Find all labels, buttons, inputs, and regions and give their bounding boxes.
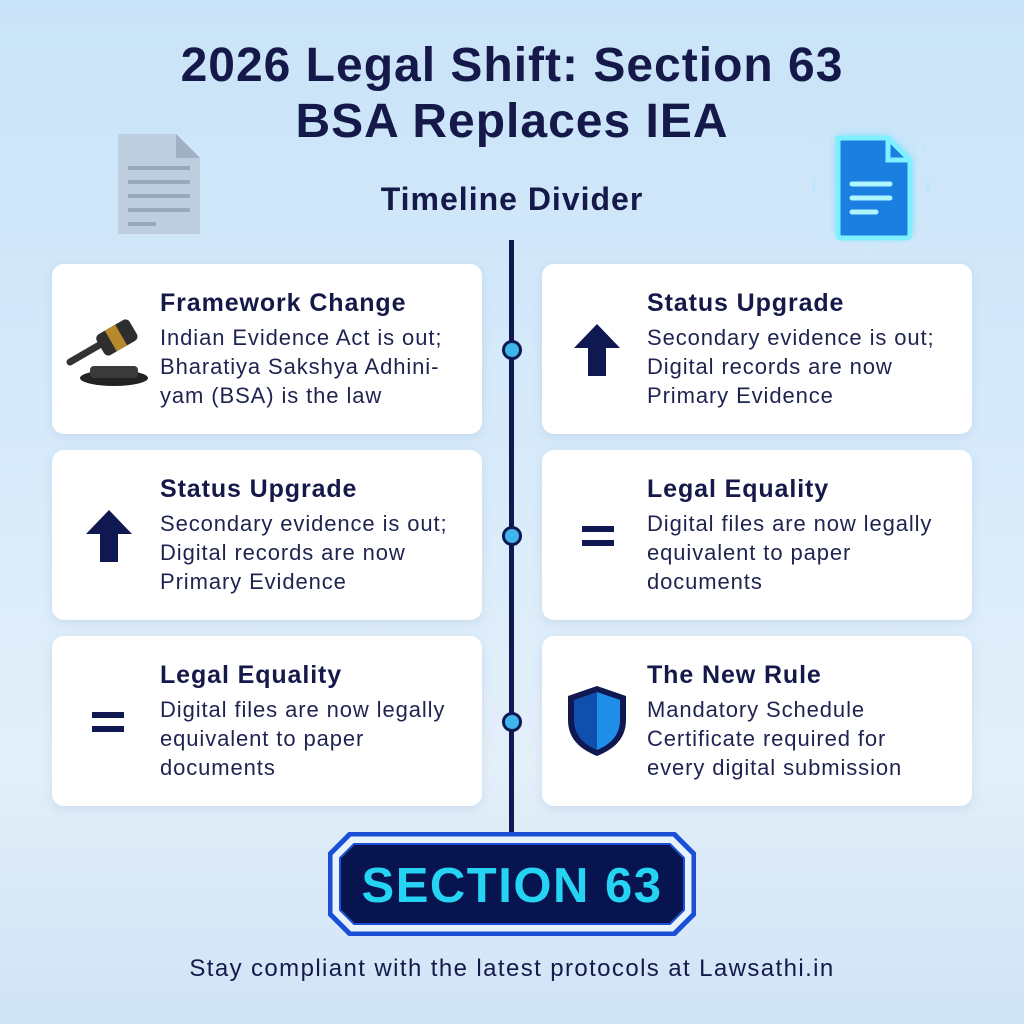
panel: Legal Equality (right): Legal Equality [647, 475, 829, 503]
panel: Status Upgrade (left): Digital records are now [160, 540, 406, 565]
panel: Status Upgrade (right): Status Upgrade [647, 289, 844, 317]
panel: Legal Equality (left) [52, 636, 482, 806]
panel: Status Upgrade (right): Primary Evidence [647, 383, 834, 408]
title: BSA Replaces IEA [295, 95, 729, 148]
panel: Legal Equality (left): Digital files are now legally [160, 697, 445, 722]
panel: Legal Equality (left): documents [160, 755, 276, 780]
panel: Status Upgrade (right): Secondary evidence is out; [647, 325, 935, 350]
panel: Legal Equality (right): equivalent to paper [647, 540, 851, 565]
panel: Framework Change: yam (BSA) is the law [160, 383, 382, 408]
icon: up arrow [574, 324, 620, 376]
title [181, 39, 843, 148]
panel: The New Rule [542, 636, 972, 806]
icon: up arrow [86, 510, 132, 562]
panel: Framework Change: Indian Evidence Act is out; [160, 325, 442, 350]
panel: Legal Equality (right) [542, 450, 972, 620]
panel: Status Upgrade (left): Primary Evidence [160, 569, 347, 594]
panel: The New Rule: Mandatory Schedule [647, 697, 865, 722]
timeline dot 2 [502, 526, 522, 546]
panel: Framework Change: Framework Change [160, 289, 406, 317]
icon: equals [582, 526, 614, 546]
panel: Status Upgrade (left): Secondary evidence is out; [160, 511, 448, 536]
badge: SECTION 63: SECTION 63 [362, 859, 662, 913]
panel: Status Upgrade (right) [542, 264, 972, 434]
panel: The New Rule: Certificate required for [647, 726, 886, 751]
panel: Status Upgrade (left) [52, 450, 482, 620]
panel: Framework Change [52, 264, 482, 434]
timeline dot 1 [502, 340, 522, 360]
panel: Legal Equality (left): Legal Equality [160, 661, 342, 689]
title: 2026 Legal Shift: Section 63 [181, 39, 843, 92]
icon: faded document [118, 134, 200, 234]
timeline line [509, 240, 514, 834]
panel: Legal Equality (right): Digital files are now legally [647, 511, 932, 536]
panel: Status Upgrade (right): Digital records are now [647, 354, 893, 379]
panel: Framework Change: Bharatiya Sakshya Adhini- [160, 354, 439, 379]
icon: glowing digital document [813, 130, 929, 242]
subtitle: Timeline Divider: Timeline Divider [381, 181, 643, 217]
panel: Legal Equality (right): documents [647, 569, 763, 594]
icon: equals [92, 712, 124, 732]
panel: Legal Equality (left): equivalent to paper [160, 726, 364, 751]
timeline dot 3 [502, 712, 522, 732]
panel: Status Upgrade (left): Status Upgrade [160, 475, 357, 503]
icon: gavel [66, 319, 148, 386]
icon: shield [568, 686, 626, 756]
badge: SECTION 63 [328, 832, 696, 936]
panel: The New Rule: every digital submission [647, 755, 902, 780]
footer text: Stay compliant with the latest protocols at Lawsathi.in [189, 955, 835, 982]
panel: The New Rule: The New Rule [647, 661, 822, 689]
